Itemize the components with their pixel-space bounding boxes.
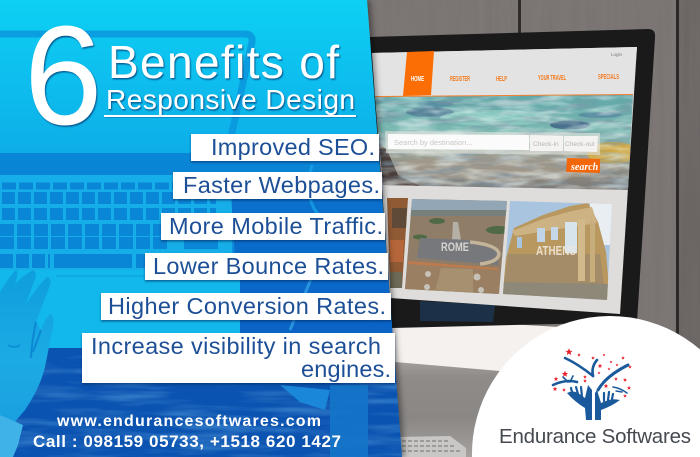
hand [0,270,53,423]
website nav bar [372,47,637,98]
sleeve [0,415,23,457]
website nav bar: REGISTER [450,76,470,83]
search form: Check-out [565,141,595,148]
search form: Check-in [533,141,559,148]
benefit: Faster Webpages: Faster Webpages. [183,172,380,198]
trackpad [0,270,240,348]
benefit: Increase visibility: Increase visibility in search [91,333,381,359]
logo badge [472,316,700,457]
icon: red stars [553,348,632,398]
benefit: Increase visibility [82,333,395,383]
search form: Search by destination... [394,138,472,147]
website: www.endurancesoftwares.com [56,413,321,430]
benefit: Higher Conversion Rates: Higher Conversion Rates. [108,293,386,319]
monitor stand and desk [385,360,515,457]
website nav bar: HOME [411,76,424,83]
desk [0,348,402,457]
keyboard keys [0,186,218,261]
temple [502,203,610,298]
heading: Benefits of: Benefits of [108,36,339,88]
benefits list [82,134,395,383]
website nav bar: YOUR TRAVEL [538,75,566,82]
search button [566,158,600,173]
benefit: Lower Bounce Rates: Lower Bounce Rates. [153,253,384,279]
benefit: Increase visibility: engines. [301,356,391,382]
website nav bar: Login [611,52,623,57]
laptop background image [0,34,402,457]
website nav bar: SPECIALS [598,74,619,81]
thumbnail strip [387,198,408,288]
monitor bezel [368,29,655,328]
phone: Call : 098159 05733, +1518 620 1427 [33,432,341,451]
screen [372,47,637,314]
monitor [368,29,655,457]
left hand [567,385,592,420]
benefit: Improved SEO: Improved SEO. [211,134,375,160]
search form: search [570,162,599,173]
sea hero image [370,92,640,192]
contact details [33,413,341,451]
search form [385,131,600,173]
benefit: More Mobile Traffic: More Mobile Traffic. [169,213,383,239]
keyboard [398,436,466,457]
big number 6: 6 [24,0,102,154]
photo: Athens: ATHENS [536,243,576,258]
monitor chin [390,317,560,371]
company name: Endurance Softwares [499,425,691,448]
photo: Athens [500,200,615,302]
website nav bar: HELP [496,76,507,83]
photo: Rome [405,199,507,294]
photo: Rome: ROME [441,240,469,254]
subheading: Responsive Design: Responsive Design [106,84,355,115]
title [24,0,356,154]
panel: blue benefits panel [0,0,402,457]
right hand [595,390,620,420]
icon: tree with hands [553,348,632,420]
active tab [403,51,434,96]
